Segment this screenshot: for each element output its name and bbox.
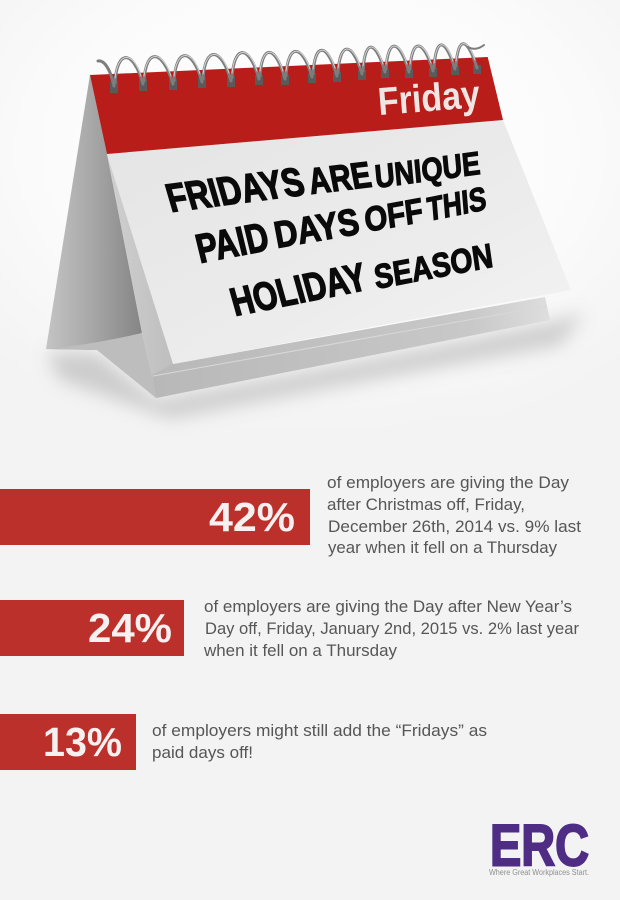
spiral binding [98,44,484,93]
red bar 24% [0,600,184,656]
logo tagline: Where Great Workplaces Start. [489,868,589,877]
description 13%: paid days off! [152,744,253,762]
headline line 2: DAYS [271,201,363,257]
red bar 13% [0,714,136,770]
headline line 2 [191,179,488,272]
description 42%: year when it fell on a Thursday [328,539,558,557]
background fade [0,380,620,440]
stand front edge strip [107,154,180,398]
figure 42%: 42% [209,494,295,540]
description 42% [327,474,581,557]
headline line 3 [225,236,495,325]
stand floor fold [46,333,156,398]
headline [161,145,495,325]
calendar page [107,120,571,364]
stat row: 42% [0,474,581,557]
calendar back stand [46,75,142,350]
day label: Friday [376,73,482,124]
background glow [0,0,620,430]
red bar 42% [0,489,310,545]
headline line 1: UNIQUE [373,145,482,195]
description 42%: after Christmas off, Friday, [327,496,525,514]
ERC logo [489,814,589,878]
headline line 2: OFF [362,191,425,239]
headline line 1: FRIDAYS [161,159,310,221]
stat row: 13% [0,714,487,770]
stat row: 24% [0,598,579,660]
headline line 2: THIS [426,179,488,228]
headline line 3: HOLIDAY [225,255,372,325]
description 24% [203,598,579,660]
logo wordmark: ERC [490,814,589,878]
headline line 3: SEASON [372,236,495,296]
calendar illustration [46,44,585,418]
description 42%: December 26th, 2014 vs. 9% last [328,518,581,536]
description 24%: of employers are giving the Day after New Year’s [204,598,572,616]
headline line 2: PAID [191,213,273,272]
description 13%: of employers might still add the “Fridays” as [152,722,487,740]
calendar lower sheet [152,297,550,398]
headline line 1 [161,145,482,221]
description 13% [152,722,487,762]
calendar shadow [46,312,585,418]
figure 13%: 13% [43,719,122,765]
figure 24%: 24% [88,605,172,651]
red header band [90,57,503,154]
headline line 1: ARE [305,155,375,203]
description 24%: when it fell on a Thursday [203,642,398,660]
description 42%: of employers are giving the Day [327,474,570,492]
lower sheet fold line [153,306,547,376]
description 24%: Day off, Friday, January 2nd, 2015 vs. 2% last year [205,620,579,638]
